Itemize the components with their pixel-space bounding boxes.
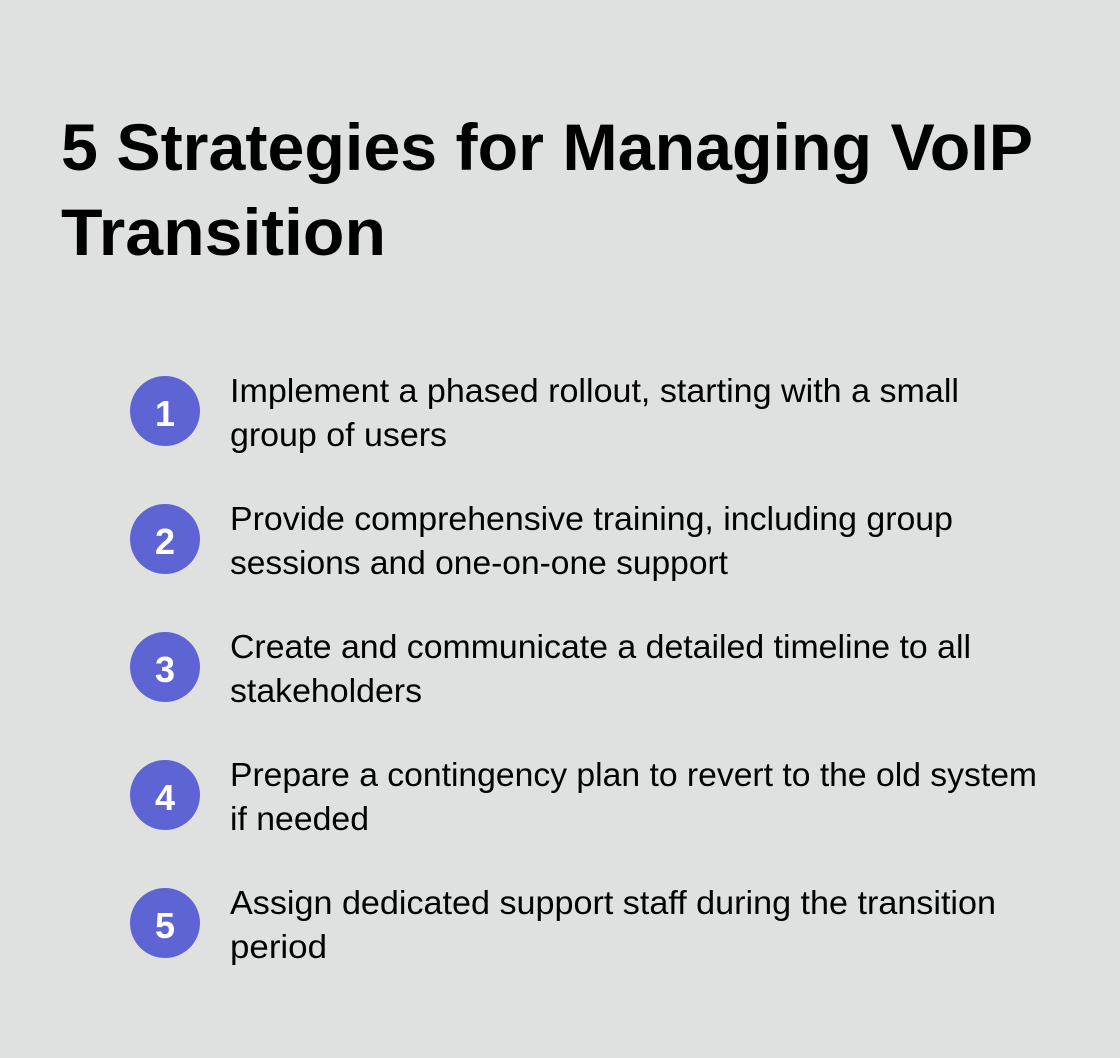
item 1 text [230, 372, 959, 453]
item 5 text: Assign dedicated support staff during the transition [230, 884, 996, 921]
item 5 [130, 884, 996, 965]
item 3 text: Create and communicate a detailed timeline to all [230, 628, 971, 665]
item 1 text: group of users [230, 416, 447, 453]
item 5 text [230, 884, 996, 965]
item 4 text [230, 756, 1037, 837]
item 3 text [230, 628, 971, 709]
item 1 text: Implement a phased rollout, starting with a small [230, 372, 959, 409]
badge 4 [130, 760, 200, 830]
title [61, 110, 1033, 269]
item 2 text: Provide comprehensive training, including group [230, 500, 953, 537]
badge 3: 3 [155, 649, 175, 690]
item 4 text: if needed [230, 800, 369, 837]
title: Transition [61, 195, 386, 269]
badge 3 [130, 632, 200, 702]
badge 5 [130, 888, 200, 958]
item 2 text [230, 500, 953, 581]
item 4 [130, 756, 1037, 837]
item 3 text: stakeholders [230, 672, 422, 709]
badge 4: 4 [155, 777, 175, 818]
badge 1 [130, 376, 200, 446]
badge 5: 5 [155, 905, 175, 946]
item 3 [130, 628, 971, 709]
badge 2: 2 [155, 521, 175, 562]
item 2 [130, 500, 953, 581]
badge 2 [130, 504, 200, 574]
item 5 text: period [230, 928, 327, 965]
item 1 [130, 372, 959, 453]
title: 5 Strategies for Managing VoIP [61, 110, 1033, 184]
item 4 text: Prepare a contingency plan to revert to the old system [230, 756, 1037, 793]
item 2 text: sessions and one-on-one support [230, 544, 728, 581]
badge 1: 1 [155, 393, 175, 434]
list: strategies [130, 372, 1037, 965]
